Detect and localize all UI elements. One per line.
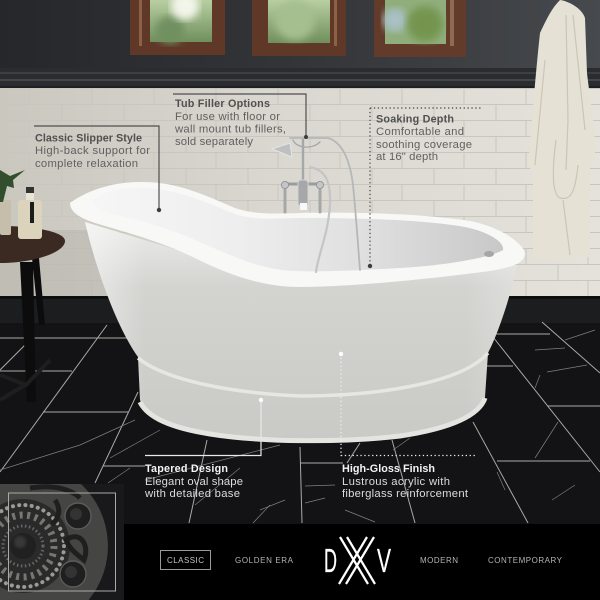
dotted leader line [341, 354, 475, 456]
DXV logo [324, 537, 391, 584]
DXV logo: V [377, 542, 391, 579]
callout: soaking depth: soothing coverage [376, 139, 472, 151]
tub body [85, 222, 517, 442]
upper base trim [138, 353, 488, 396]
callout: tub filler options [173, 94, 308, 148]
baseboard [0, 296, 600, 325]
callout: soaking depth [368, 108, 482, 268]
bathrobe on hook [528, 0, 595, 262]
table legs [20, 258, 45, 402]
era: modern: MODERN [420, 556, 458, 565]
chair rail molding [0, 68, 600, 89]
scroll rosettes [30, 487, 91, 587]
callout: soaking depth: at 16" depth [376, 151, 438, 163]
callout: soaking depth: Soaking Depth [376, 114, 454, 126]
era selector: classic [160, 550, 210, 570]
callout: tapered design: Tapered Design [145, 463, 228, 475]
plant pot [0, 200, 11, 235]
callout: high-gloss finish: Lustrous acrylic with [342, 476, 450, 488]
bathtub [70, 182, 525, 442]
callout: high-gloss finish: High-Gloss Finish [342, 463, 435, 475]
footer bar [124, 524, 600, 600]
era: golden era: GOLDEN ERA [235, 556, 294, 565]
bead ring [0, 505, 64, 587]
era: contemporary: CONTEMPORARY [488, 556, 563, 565]
tub interior [93, 188, 503, 271]
DXV logo: D [324, 542, 337, 579]
table top [0, 226, 65, 263]
callout: tub filler options: sold separately [175, 136, 253, 148]
rim [70, 182, 525, 287]
callout: classic slipper style: complete relaxation [35, 158, 138, 170]
leader line [34, 126, 159, 210]
callout: tapered design [144, 398, 263, 500]
side table with bottle and plant [0, 170, 65, 402]
bottle [18, 187, 42, 239]
callout: tub filler options: Tub Filler Options [175, 98, 270, 110]
central dome [10, 533, 36, 559]
marble floor [0, 322, 600, 525]
leader line [173, 94, 306, 137]
overflow drain [484, 251, 494, 257]
callout: high-gloss finish [339, 352, 475, 500]
callout: tub filler options: wall mount tub fillers, [174, 124, 286, 136]
lower base trim [140, 398, 485, 441]
window left [130, 0, 225, 55]
dotted leader line [370, 108, 482, 266]
callout: high-gloss finish: fiberglass reinforcement [342, 488, 469, 500]
leader line [145, 400, 261, 456]
faucet and hand shower [272, 138, 360, 272]
callout: classic slipper style [34, 126, 161, 212]
ornate medallion [0, 484, 124, 600]
callout: soaking depth: Comfortable and [376, 126, 464, 138]
tiled wall [0, 88, 600, 297]
callout: classic slipper style: High-back support for [35, 145, 150, 157]
window middle [252, 0, 346, 56]
petal ring [0, 515, 54, 577]
background: dark wall [0, 0, 600, 70]
window right [374, 0, 466, 57]
callout: tub filler options: For use with floor or [175, 111, 280, 123]
plant leaves [0, 170, 25, 202]
medallion frame [8, 493, 116, 591]
callout: tapered design: with detailed base [144, 488, 240, 500]
callout: classic slipper style: Classic Slipper Style [35, 132, 142, 144]
era selector: classic: CLASSIC [167, 556, 204, 565]
callout: tapered design: Elegant oval shape [145, 476, 243, 488]
